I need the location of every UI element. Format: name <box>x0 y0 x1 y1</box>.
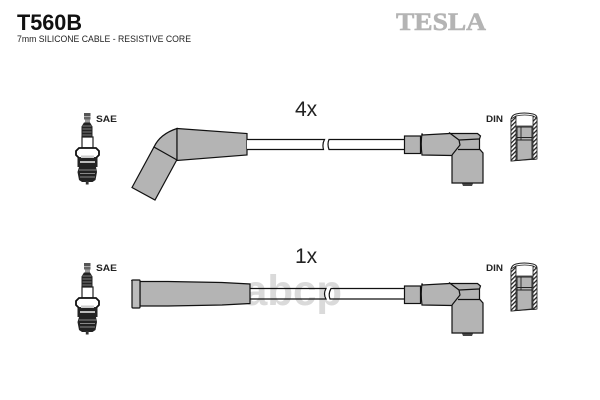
label: DIN top: DIN <box>486 114 503 124</box>
icon: spark plug bottom <box>76 263 99 334</box>
bottom wire: straight boot, cable and right connector <box>132 280 483 336</box>
cable with break <box>247 140 404 150</box>
quantity label: 4x: 4x <box>295 98 318 121</box>
right connector <box>404 282 483 336</box>
top wire: angled boot, cable and right connector <box>132 128 483 200</box>
cable with break <box>250 288 404 299</box>
quantity label: 1x: 1x <box>295 245 318 268</box>
right connector <box>404 132 483 186</box>
watermark: abcp <box>244 267 342 315</box>
straight boot <box>132 280 250 308</box>
angled boot <box>132 128 247 200</box>
icon: DIN socket bottom <box>511 263 537 311</box>
icon: DIN socket top <box>511 113 537 161</box>
label: DIN bottom: DIN <box>486 263 503 273</box>
icon: spark plug top <box>76 113 99 184</box>
subtitle: cable description: 7mm SILICONE CABLE - RESISTIVE CORE <box>17 34 191 44</box>
logo: TESLA: TESLA <box>396 9 486 36</box>
title: T560B: T560B <box>17 10 82 35</box>
label: SAE top: SAE <box>96 114 117 124</box>
label: SAE bottom: SAE <box>96 263 117 273</box>
